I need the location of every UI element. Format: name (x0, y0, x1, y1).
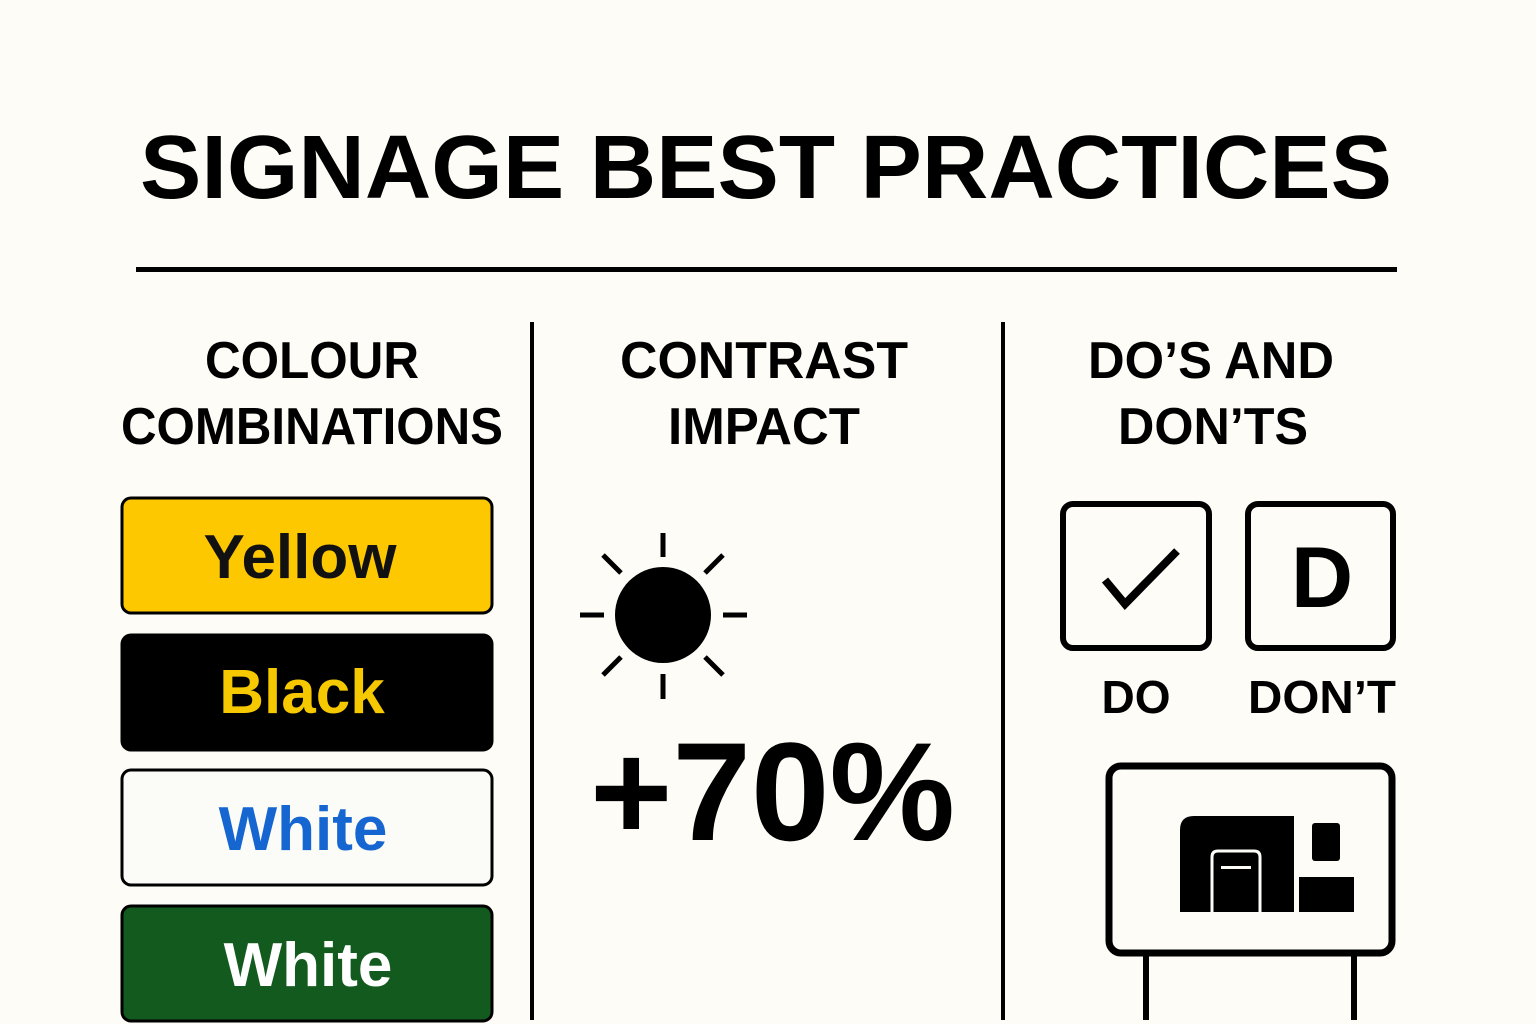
labels: do / dont (1102, 671, 1396, 723)
heading: colour combinations: COLOUR (205, 332, 419, 390)
swatch: black (122, 635, 492, 750)
labels: do / dont: DON’T (1248, 671, 1396, 723)
title: SIGNAGE BEST PRACTICES (140, 118, 1392, 218)
icon: sun (580, 533, 747, 699)
labels: do / dont: DO (1102, 671, 1170, 723)
icon: do check (1063, 504, 1209, 648)
icon: dont D: D (1291, 530, 1353, 626)
stat: +70%: +70% (590, 713, 955, 870)
heading: dos and donts (1088, 332, 1334, 456)
swatch: green white (122, 906, 492, 1021)
heading: contrast impact: IMPACT (668, 398, 860, 456)
swatch: green white: White (224, 931, 392, 1000)
heading: dos and donts: DON’TS (1118, 398, 1308, 456)
swatch: black: Black (219, 658, 385, 727)
heading: contrast impact: CONTRAST (620, 332, 908, 390)
swatch: yellow: Yellow (204, 523, 397, 592)
heading: contrast impact (620, 332, 908, 456)
icon: dont D (1248, 504, 1393, 648)
panel: colour swatches (122, 498, 492, 1021)
swatch: white blue (122, 770, 492, 885)
heading: colour combinations: COMBINATIONS (121, 398, 503, 456)
swatch: yellow (122, 498, 492, 613)
swatch: white blue: White (219, 795, 387, 864)
heading: dos and donts: DO’S AND (1088, 332, 1334, 390)
icon: signboard (1109, 766, 1392, 1020)
heading: colour combinations (121, 332, 503, 456)
